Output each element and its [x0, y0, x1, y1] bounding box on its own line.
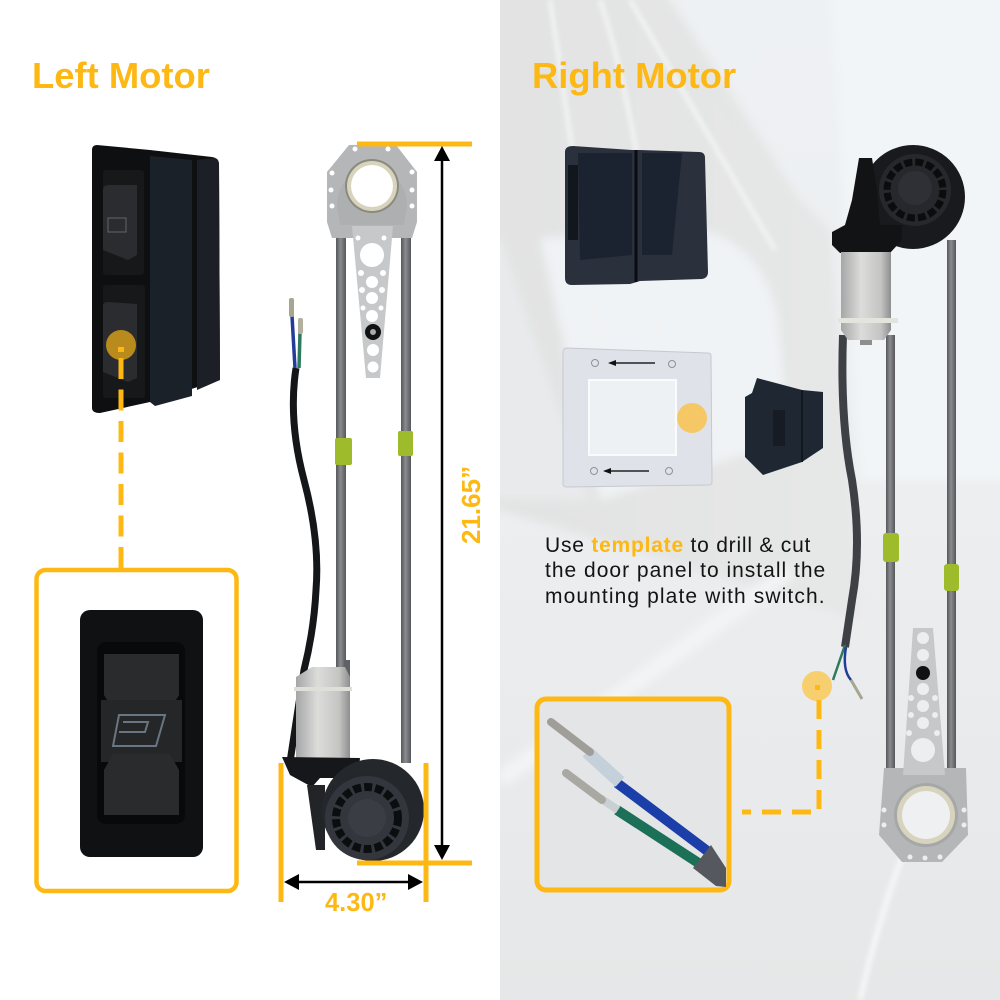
text block: template instructions: the door panel to install the	[545, 559, 826, 582]
rods	[336, 235, 411, 763]
motor drum	[322, 759, 424, 861]
terminals	[551, 722, 620, 810]
heading: Left Motor: Left Motor	[32, 55, 210, 96]
panel: right background car photo	[470, 0, 1000, 1000]
motor body	[294, 667, 352, 758]
dimension: height 21.65: 21.65”	[456, 466, 486, 544]
rods	[886, 240, 956, 780]
callout: wire close-up	[537, 699, 729, 890]
switch cover	[565, 146, 708, 285]
text block: template instructions: mounting plate with switch.	[545, 585, 826, 608]
motor drum	[861, 145, 965, 249]
cable with wires	[833, 335, 862, 699]
dimension: width 4.30: 4.30”	[325, 889, 387, 917]
dashed connector: wires to close-up	[742, 671, 832, 812]
dimension: height 21.65	[357, 144, 486, 863]
mounting template	[563, 348, 712, 487]
icon: window glyph	[113, 715, 165, 746]
panel: left background	[0, 0, 500, 1000]
switch unit, side view	[92, 145, 220, 413]
clips	[883, 533, 959, 591]
perforated arm	[903, 628, 945, 775]
dimension: width 4.30	[281, 763, 426, 917]
heading: Right Motor: Right Motor	[532, 55, 736, 96]
bracket top	[327, 145, 417, 238]
bracket bottom	[879, 768, 968, 862]
mounting plate with switch	[745, 378, 823, 475]
dashed connector: switch to close-up	[106, 330, 136, 568]
left motor assembly	[282, 145, 424, 861]
black cable with wires	[289, 298, 317, 762]
clips	[335, 431, 413, 465]
callout: switch close-up	[36, 570, 236, 891]
gear housing	[832, 158, 902, 253]
gear housing and shaft	[282, 757, 360, 850]
motor body	[838, 252, 898, 345]
perforated arm	[352, 226, 393, 378]
text block: template instructions	[545, 534, 826, 608]
right motor assembly	[832, 145, 968, 862]
text block: template instructions: Use template to drill & cut	[545, 534, 811, 557]
wires	[617, 783, 710, 864]
sheath	[693, 845, 726, 887]
